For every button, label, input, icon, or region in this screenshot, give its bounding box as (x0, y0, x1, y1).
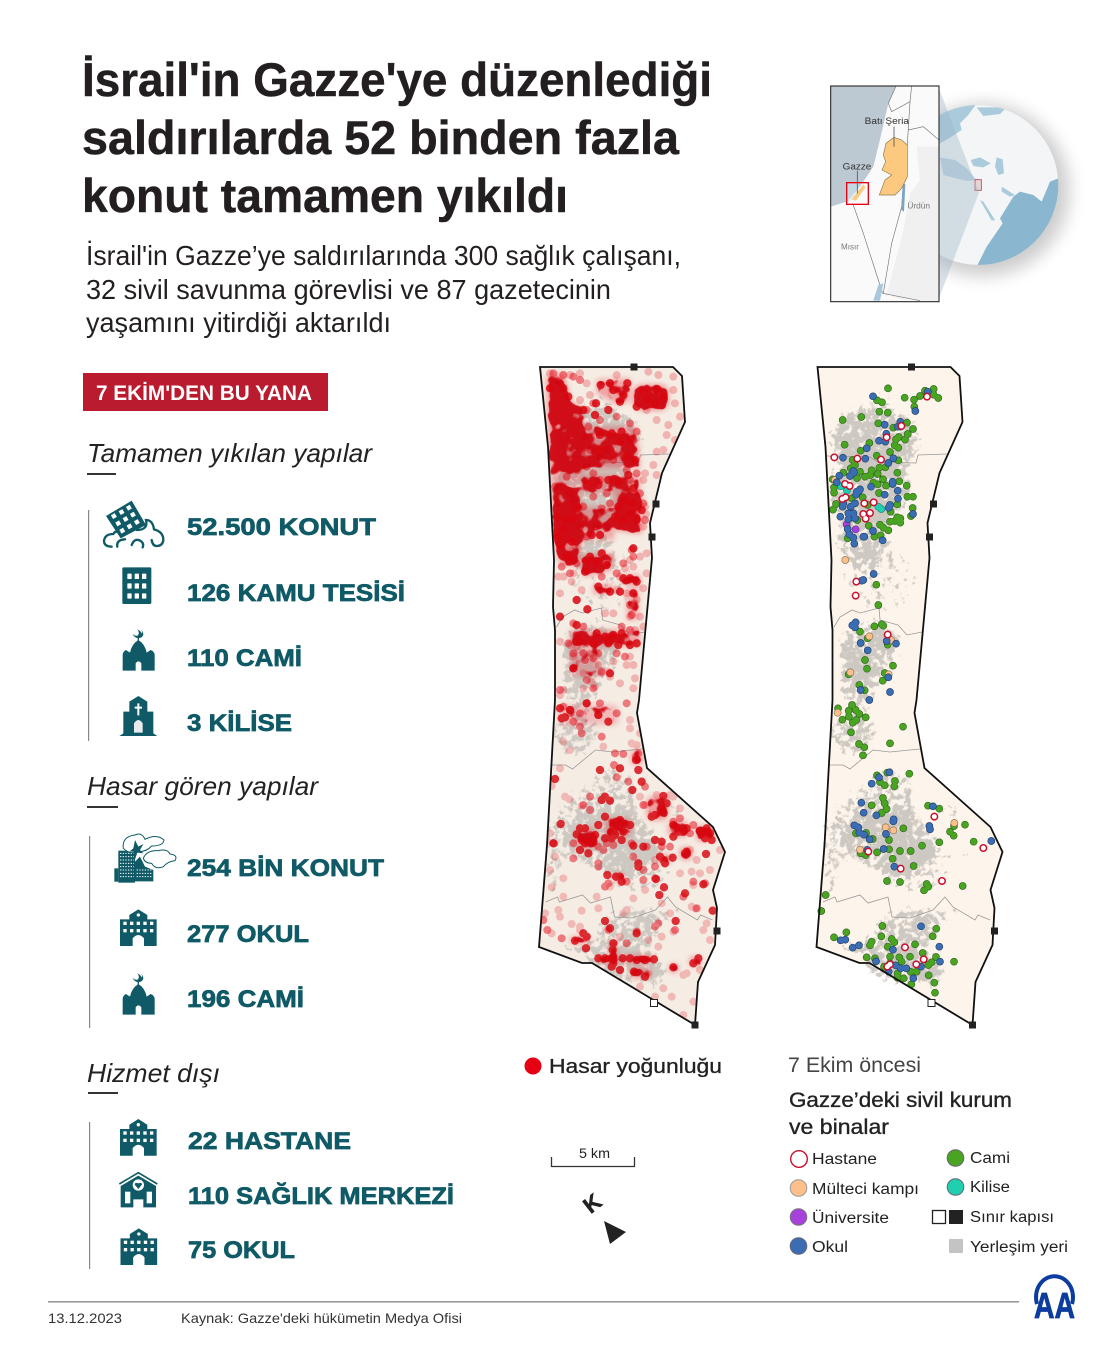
footer date: 13.12.2023 (48, 1310, 122, 1326)
damage dots lower light (543, 703, 720, 1015)
legend: mosque: Cami (970, 1150, 1010, 1167)
red locator box (847, 183, 868, 204)
icon: hospital (120, 1119, 157, 1156)
subtitle (86, 240, 681, 338)
icon: health centre (119, 1173, 157, 1207)
strip outline (539, 367, 725, 1025)
legend: damage density: Hasar yoğunluğu (549, 1056, 722, 1078)
logo: AA: AA (1034, 1285, 1075, 1326)
legend: settlement: Yerleşim yeri (970, 1239, 1068, 1256)
soft red haze (547, 373, 714, 978)
globe (940, 105, 1058, 265)
logo: AA (1034, 1276, 1075, 1326)
heading: Tamamen yıkılan yapılar (87, 438, 373, 468)
strip outline (816, 367, 1002, 1025)
section: out of service (87, 1058, 454, 1269)
title: konut tamamen yıkıldı (82, 169, 568, 222)
stat: mosques: 110 CAMİ (187, 645, 302, 672)
strip land (816, 367, 1002, 1025)
inset labels: Batı Şeria (865, 116, 909, 126)
legend title (789, 1089, 1012, 1139)
icon: damaged buildings (114, 834, 176, 883)
legend: school: Okul (812, 1239, 848, 1256)
legend: border crossing (932, 1209, 1054, 1226)
subtitle: İsrail'in Gazze’ye saldırılarında 300 sağlık çalışanı, (86, 240, 681, 271)
stat: housing: 52.500 KONUT (187, 514, 376, 541)
inset map (831, 86, 939, 302)
damage density field (547, 373, 714, 978)
globe location marker (975, 180, 981, 190)
legend: hospital: Hastane (812, 1151, 877, 1168)
heading: Hizmet dışı (87, 1058, 220, 1088)
stat: damaged schools: 277 OKUL (187, 921, 309, 948)
scale bar (552, 1145, 634, 1166)
subtitle: 32 sivil savunma görevlisi ve 87 gazetecinin (86, 274, 611, 305)
gaza (847, 183, 862, 203)
section: damaged (87, 771, 384, 1028)
section: completely destroyed (87, 438, 405, 741)
badge: 7 EKİM'DEN BU YANA (96, 382, 312, 405)
damage dots strong lower (553, 703, 713, 977)
stat: hospitals: 22 HASTANE (188, 1128, 351, 1155)
icon: mosque (123, 973, 155, 1015)
badge (83, 373, 328, 411)
legend: church: Kilise (970, 1179, 1010, 1196)
stat: churches: 3 KİLİSE (187, 710, 292, 737)
stat: damaged mosques: 196 CAMİ (187, 986, 304, 1013)
footer rule (48, 1301, 1019, 1303)
legend: refugee camp (790, 1180, 919, 1198)
projection cone (939, 88, 979, 298)
inset labels (843, 116, 909, 171)
inset labels: Gazze (843, 161, 871, 171)
globe shadow (897, 104, 1069, 276)
stat: public buildings: 126 KAMU TESİSİ (187, 580, 405, 607)
legend: refugee camp: Mülteci kampı (812, 1181, 919, 1198)
inset locator map and globe: Ürdün (907, 201, 930, 210)
inset locator map and globe: Mısır (841, 242, 859, 251)
institution dots lower (821, 705, 991, 993)
north arrow (578, 1189, 626, 1244)
legend: border crossing: Sınır kapısı (970, 1209, 1054, 1226)
icon: school (120, 1228, 157, 1265)
subtitle: yaşamını yitirdiği aktarıldı (86, 307, 391, 338)
icon: collapsing building (104, 501, 163, 547)
title: İsrail'in Gazze'ye düzenlediği (82, 53, 712, 106)
legend: institutions (788, 1054, 1068, 1256)
stat: schools: 75 OKUL (188, 1237, 295, 1264)
title: saldırılarda 52 binden fazla (82, 111, 680, 164)
institution dots upper (833, 388, 938, 700)
icon: office building (122, 567, 151, 604)
stat: health centres: 110 SAĞLIK MERKEZİ (188, 1182, 454, 1210)
legend title: Gazze’deki sivil kurum (789, 1089, 1012, 1112)
heading: Hasar gören yapılar (87, 771, 319, 801)
legend: mosque (947, 1150, 1010, 1167)
north arrow: K (578, 1189, 606, 1218)
damage dots upper light (550, 372, 680, 695)
icon: mosque (123, 629, 155, 671)
legend title: ve binalar (789, 1116, 889, 1139)
frame (831, 86, 939, 302)
legend: university (790, 1209, 889, 1227)
legend: school (790, 1238, 848, 1256)
border crossings (908, 364, 998, 1028)
title (82, 53, 712, 222)
damage dots strong upper (550, 383, 663, 673)
strip land (539, 367, 725, 1025)
map: civil institutions (816, 364, 1002, 1028)
icon: church (119, 696, 157, 736)
legend: church (947, 1179, 1010, 1196)
inset locator map and globe (831, 86, 1069, 302)
stat: damaged housing: 254 BİN KONUT (187, 855, 384, 882)
scale bar: 5 km (579, 1145, 610, 1161)
legend: hospital (791, 1151, 877, 1168)
map: damage density (539, 364, 725, 1028)
west bank (879, 137, 907, 195)
footer source: Kaynak: Gazze'deki hükümetin Medya Ofisi (181, 1310, 462, 1326)
legend: university: Üniversite (812, 1209, 889, 1227)
icon: school (120, 909, 157, 946)
legend heading: 7 Ekim öncesi (788, 1054, 921, 1077)
border crossings (630, 364, 720, 1028)
